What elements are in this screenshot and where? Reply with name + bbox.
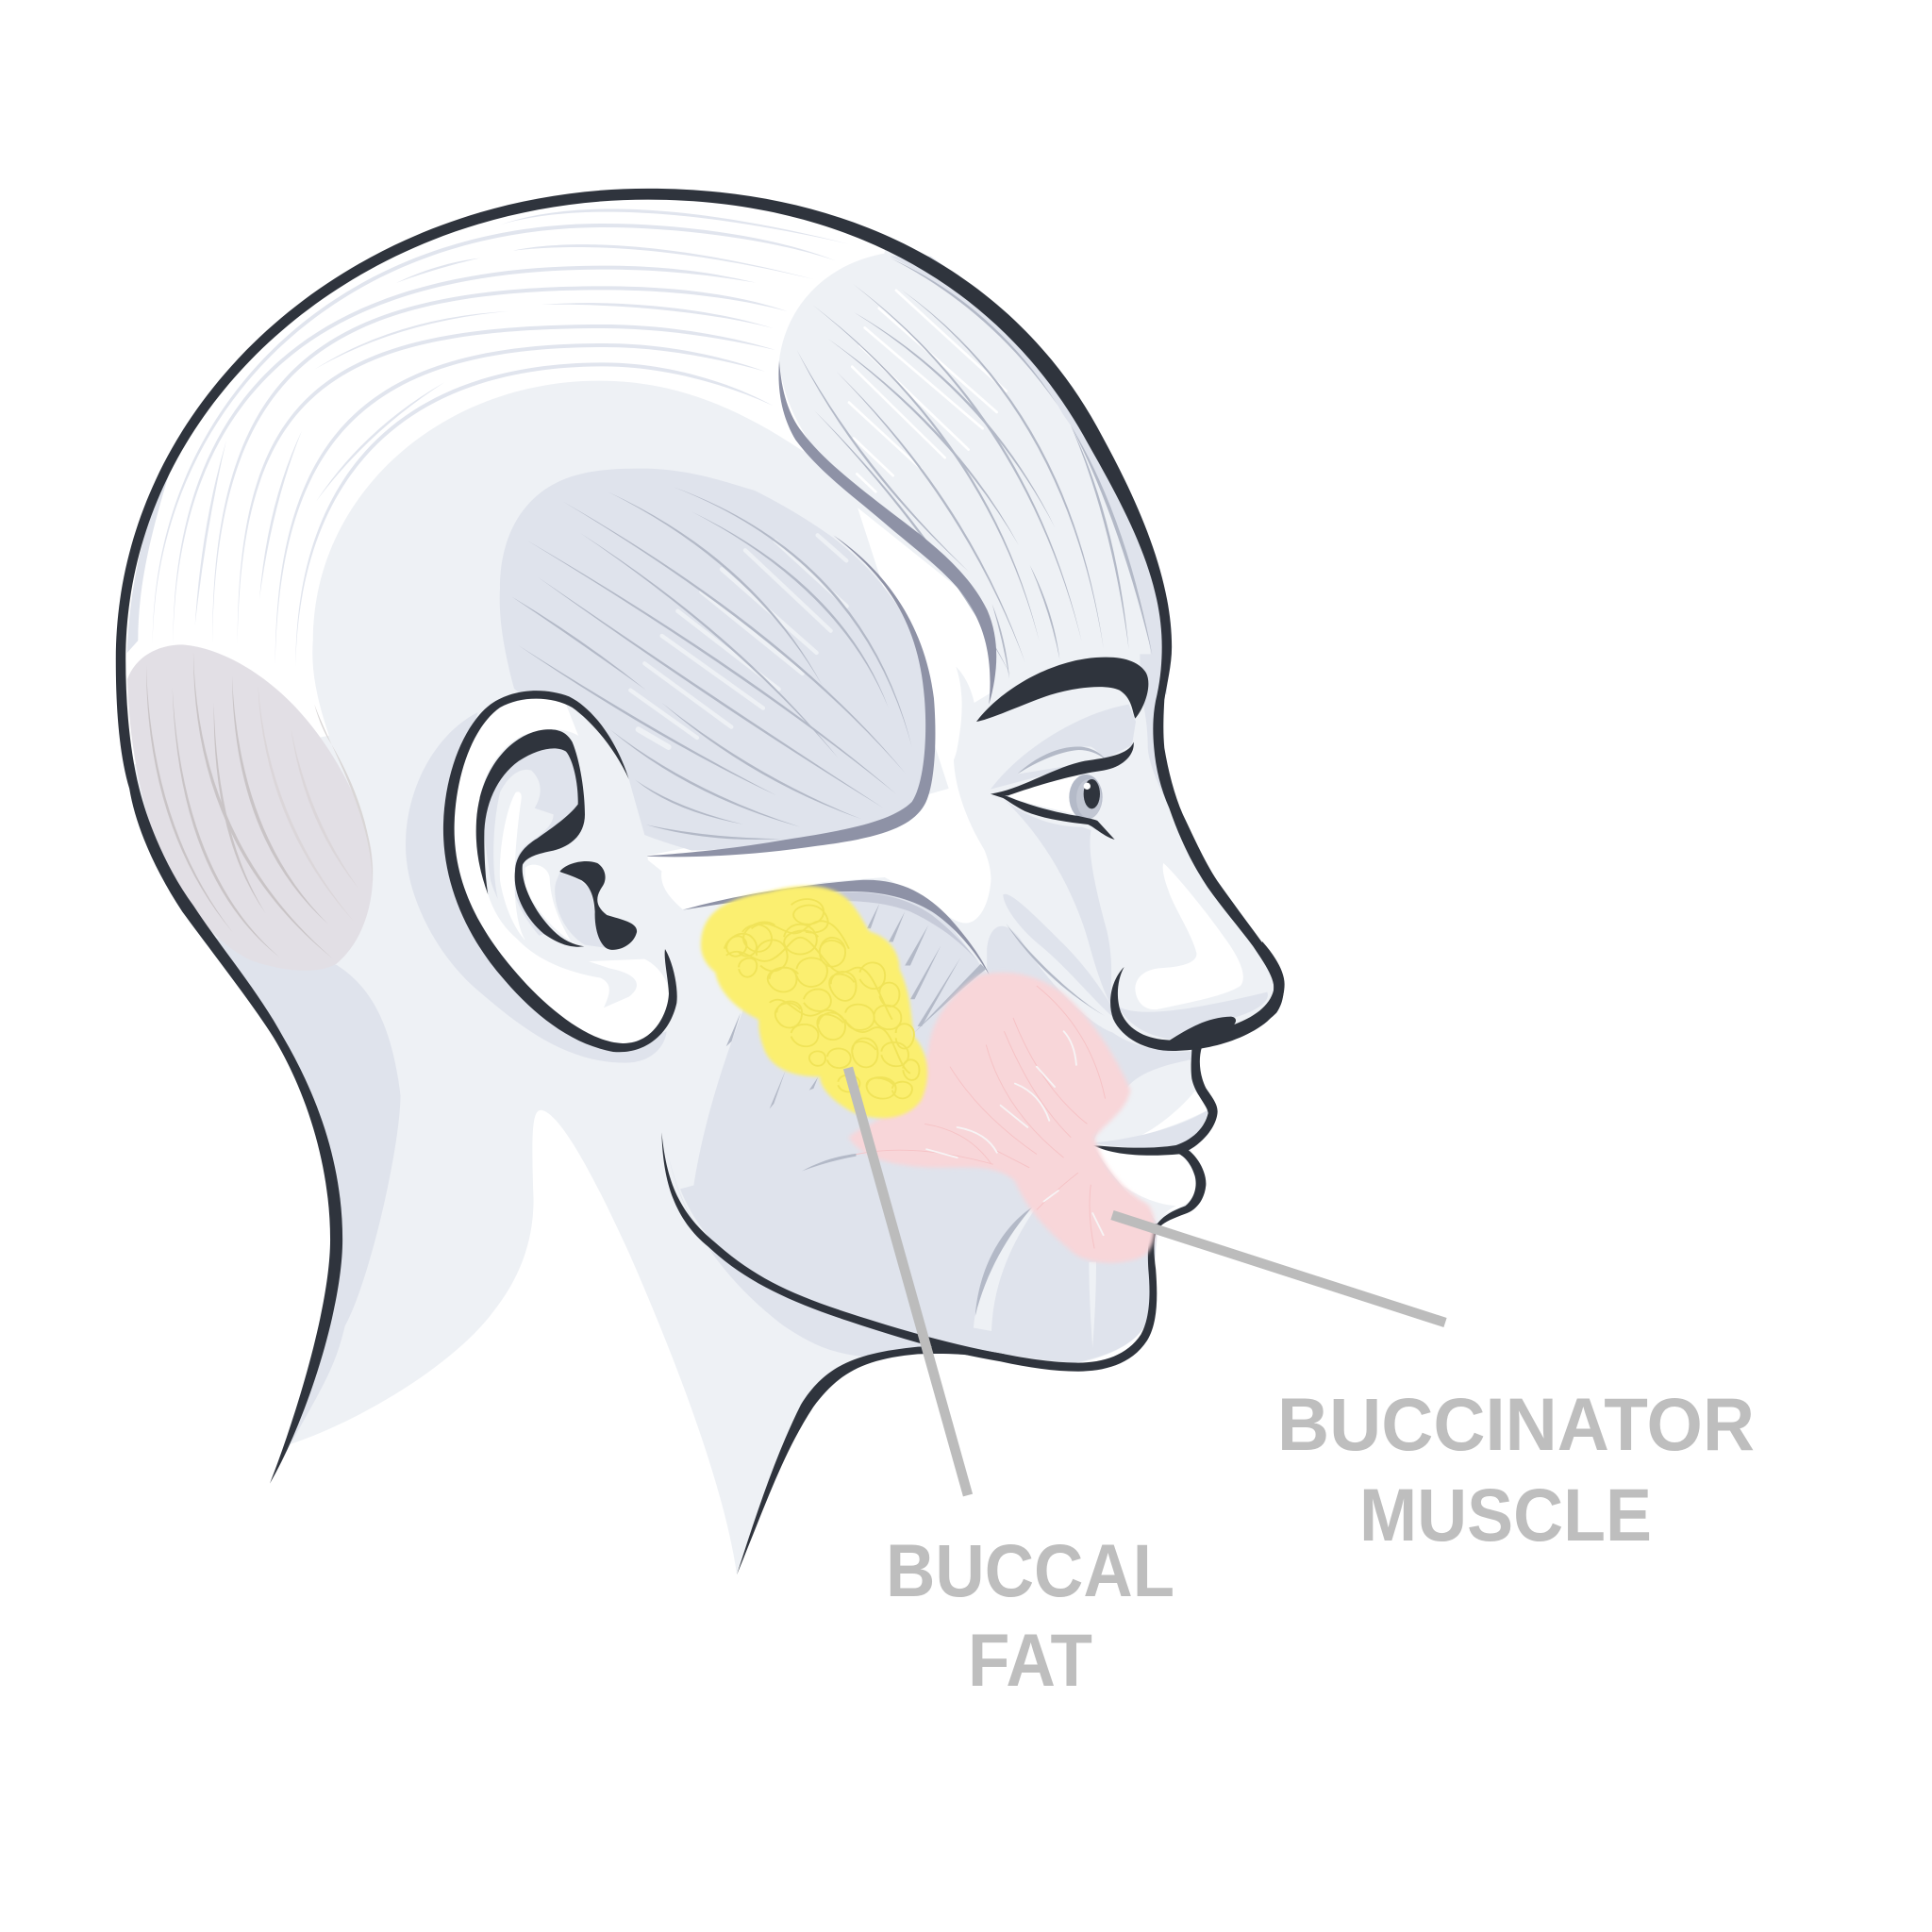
lip contour (1092, 1047, 1218, 1226)
iris (1069, 774, 1103, 820)
scalp sliver shade (127, 425, 185, 653)
helix white (453, 699, 669, 1043)
eyelid skin (1017, 746, 1104, 774)
forehead edge shade (1140, 654, 1170, 808)
upper lip shade (1092, 1110, 1208, 1147)
chin centre highlight (1089, 1262, 1096, 1348)
buccal fat pad (701, 886, 927, 1118)
pupil (1084, 779, 1100, 808)
eyebrow (976, 658, 1148, 722)
chin highlight (974, 1205, 1037, 1331)
nose highlight (1135, 863, 1243, 1009)
lower lip (1093, 1146, 1196, 1224)
occipital edge (314, 705, 373, 884)
scalp galea lines (153, 209, 849, 667)
upper lip skin (1092, 1059, 1212, 1146)
iris inner (1076, 779, 1102, 818)
eye socket shade (991, 705, 1136, 790)
label: buccinator muscle (1277, 1382, 1755, 1557)
fat pad lobules (724, 899, 919, 1099)
lower eyelid (991, 794, 1115, 840)
head silhouette skin (116, 189, 1284, 1574)
ear base (443, 691, 677, 1052)
white scalp (116, 189, 887, 764)
white highlight band between muscles (643, 508, 995, 923)
occipital light fibres (258, 682, 358, 922)
occipital fibres (146, 653, 333, 959)
occipital muscle (127, 644, 373, 971)
label: buccal fat: FAT (968, 1618, 1092, 1702)
under jaw shade (669, 1158, 986, 1357)
concha highlight (525, 865, 585, 948)
masseter light band (835, 892, 979, 962)
leader line: buccal fat (848, 1068, 968, 1495)
buccinator fill (849, 973, 1155, 1263)
temporalis muscle (500, 469, 935, 857)
jaw and chin contour (661, 1132, 1158, 1372)
smile line (802, 1154, 857, 1171)
antihelix highlight (500, 791, 525, 941)
under-eye shade (1003, 799, 1111, 1003)
buccinator muscle (849, 973, 1155, 1263)
temporalis fibres (512, 487, 912, 840)
flame highlight on temple (956, 667, 976, 755)
concha shade (555, 873, 607, 948)
temporalis highlights (630, 535, 847, 747)
eye white (1008, 774, 1091, 814)
label: buccal fat (886, 1528, 1174, 1702)
occipital fill (127, 644, 373, 971)
masseter edge (683, 880, 990, 975)
frontalis muscle (778, 253, 1170, 705)
nose outline (1110, 941, 1285, 1051)
label: buccinator muscle: BUCCINATOR (1277, 1382, 1755, 1466)
lower face shade (680, 882, 1198, 1363)
ear (406, 691, 677, 1063)
ear shadow (406, 712, 667, 1063)
inner ear shade (484, 748, 578, 936)
temporalis edge (643, 535, 935, 857)
inner helix line (476, 729, 585, 947)
label: buccinator muscle: MUSCLE (1359, 1473, 1652, 1557)
nose under shade (1118, 992, 1268, 1040)
lips (1092, 1047, 1218, 1226)
nasolabial line (1006, 924, 1106, 1016)
tragus (559, 861, 637, 950)
head and neck contour (116, 189, 1284, 1484)
eyelid crease (1017, 746, 1106, 774)
label: buccal fat: BUCCAL (886, 1528, 1174, 1612)
ear outline (443, 691, 677, 1052)
eye highlight (1084, 783, 1091, 790)
nose and eye (956, 654, 1268, 1040)
masseter and cheek details (683, 880, 1106, 1348)
buccinator fibres (857, 986, 1106, 1249)
masseter fibres (726, 903, 986, 1108)
frontalis fill (779, 253, 1161, 705)
temporalis fill (500, 469, 932, 851)
upper lip highlight (1141, 1091, 1208, 1135)
chin line (975, 1207, 1033, 1316)
upper eyelid (991, 742, 1134, 795)
lower lip edge (1123, 1186, 1176, 1224)
frontalis highlights (849, 291, 1007, 491)
frontalis edge (778, 360, 996, 705)
antihelix (493, 770, 637, 1008)
frontalis fibres (797, 258, 1153, 678)
buccinator white marks (926, 1031, 1104, 1235)
frontalis outer shade (890, 257, 1170, 695)
leader line: buccinator muscle (1112, 1215, 1445, 1323)
neck shade (209, 937, 400, 1444)
cheek streak (1003, 894, 1120, 1022)
front neck contour (737, 1346, 1004, 1574)
fat pad fill (701, 886, 927, 1118)
